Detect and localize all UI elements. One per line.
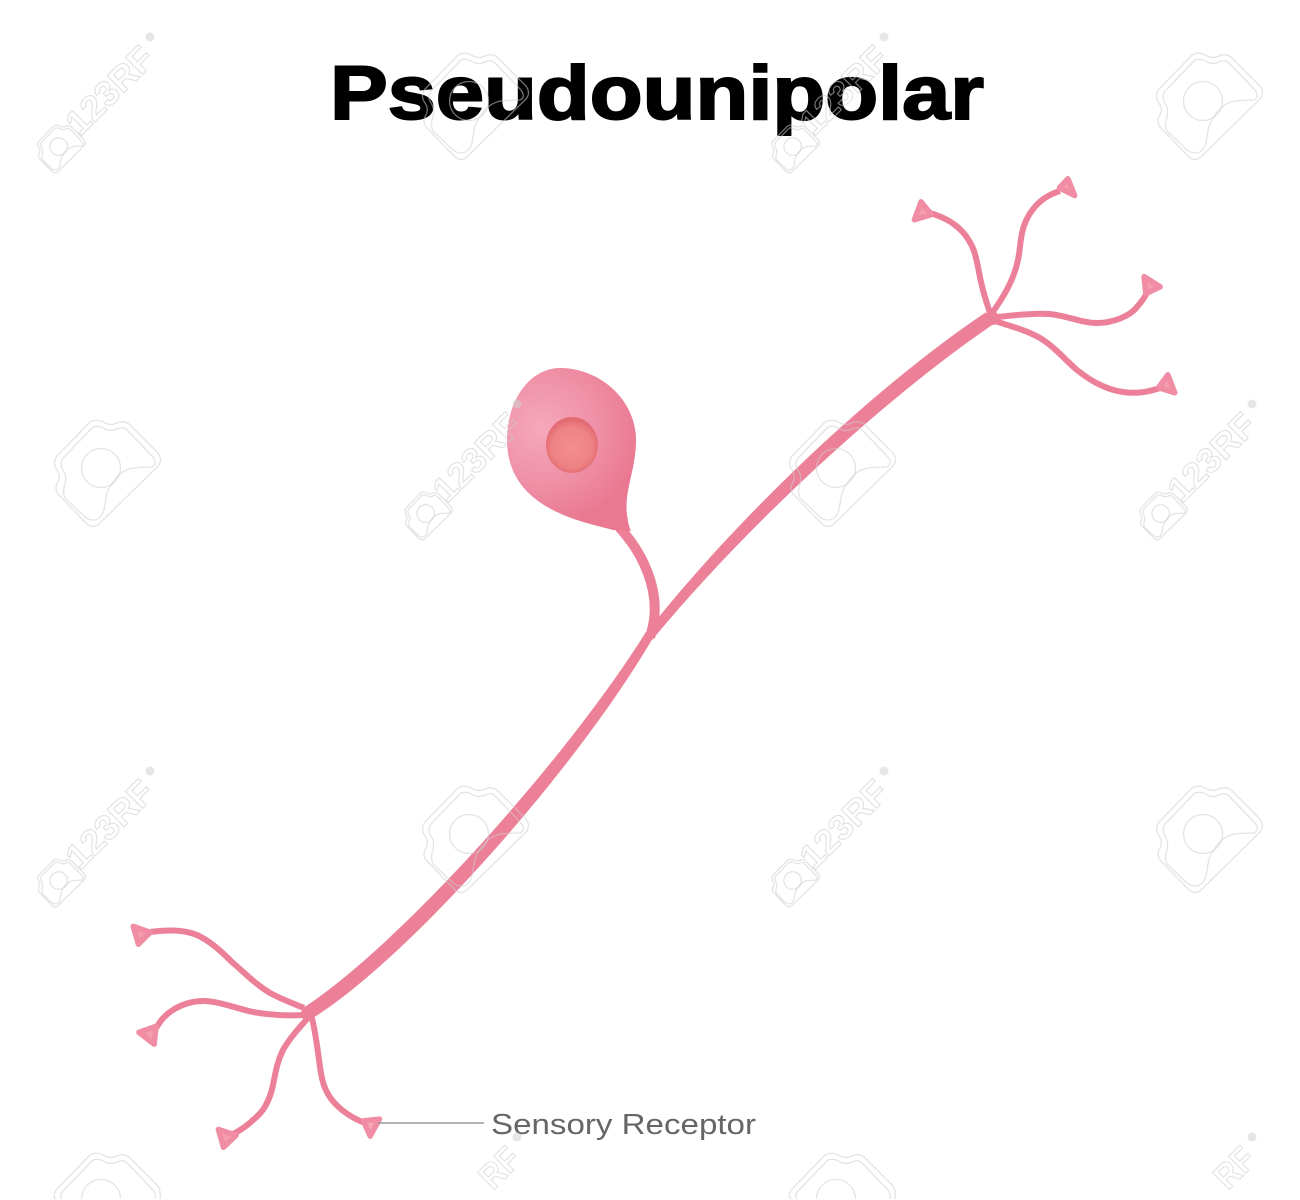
cell body (507, 368, 636, 531)
bottom terminal branches (133, 926, 380, 1147)
branch: lower left (218, 1018, 308, 1147)
leader line (378, 1122, 484, 1124)
axon stem to cell body (619, 527, 655, 637)
branch: right (998, 277, 1160, 323)
title: Pseudounipolar (330, 51, 984, 136)
top terminal branches (914, 179, 1175, 393)
bottom hub (301, 1007, 315, 1021)
branch: middle (139, 1001, 304, 1044)
top hub (985, 311, 999, 325)
branch: upper right (990, 179, 1075, 316)
branch: lower right (995, 321, 1175, 393)
branch: upper left (914, 202, 991, 316)
branch: top (133, 926, 304, 1008)
nucleus (546, 417, 598, 473)
neuron (133, 179, 1175, 1147)
axon (304, 312, 994, 1018)
branch: lower right (312, 1018, 380, 1136)
label: sensory receptor: Sensory Receptor (491, 1109, 756, 1141)
